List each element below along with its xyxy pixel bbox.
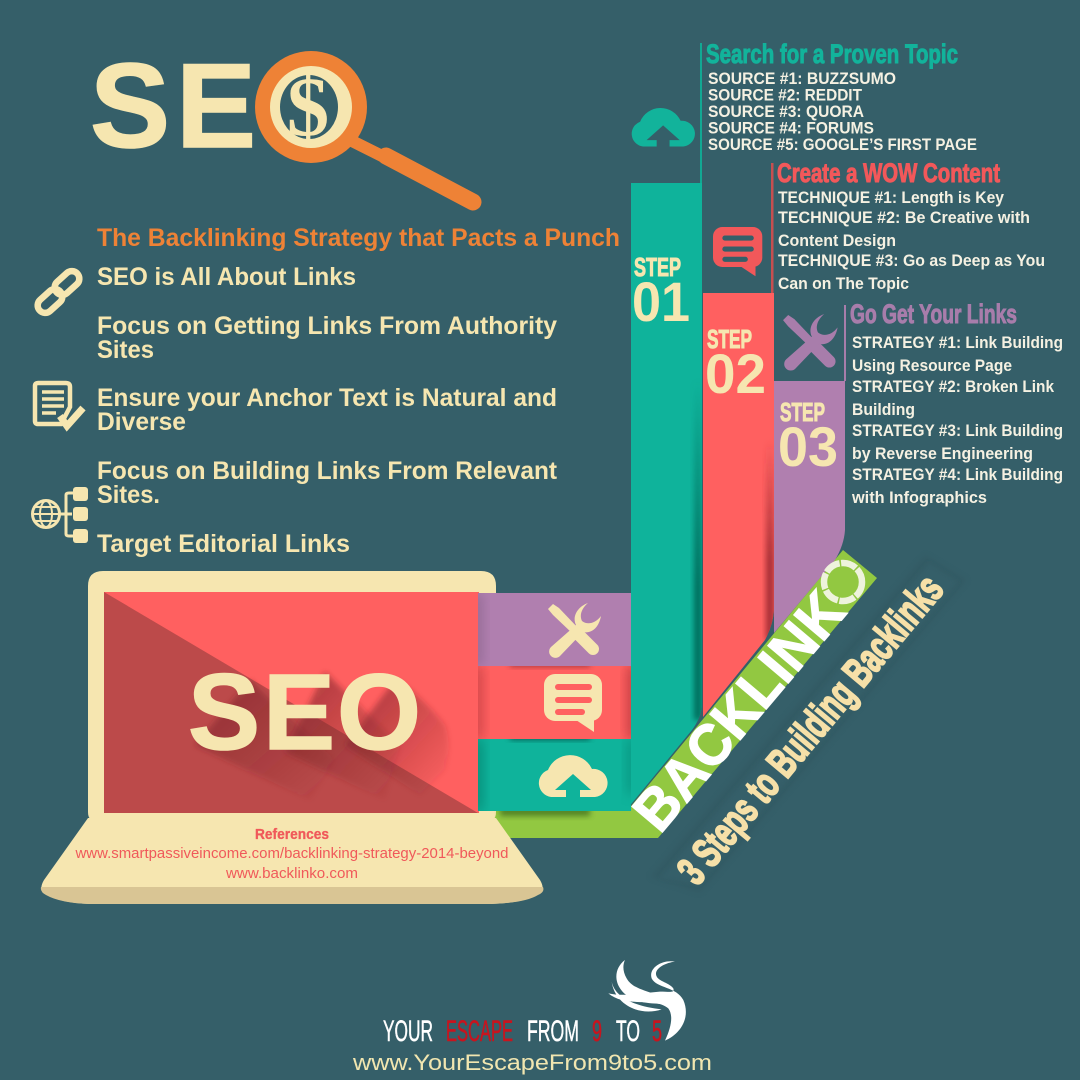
panel: step 3 column bbox=[774, 305, 846, 633]
logo wordmark: FROM bbox=[527, 1015, 579, 1048]
laptop base bbox=[41, 818, 543, 904]
step 2 techniques: TECHNIQUE #1: Length is Key bbox=[778, 188, 1004, 207]
references: www.smartpassiveincome.com/backlinking-strategy-2014-beyond bbox=[75, 845, 509, 862]
list: backlink strategy points: Target Editorial Links bbox=[97, 530, 350, 558]
list: backlink strategy points: Sites. bbox=[97, 481, 160, 509]
step 1 sources bbox=[708, 69, 977, 154]
logo: bird swoosh bbox=[608, 960, 686, 1041]
step 2 label: 02 bbox=[705, 342, 766, 405]
step 1 label: 01 bbox=[632, 270, 690, 333]
icon: tools purple bbox=[783, 314, 838, 371]
logo wordmark: YOUR bbox=[383, 1015, 433, 1048]
step 1 sources: SOURCE #3: QUORA bbox=[708, 102, 864, 121]
band: teal cloud bbox=[478, 739, 631, 811]
step 3 strategies: STRATEGY #4: Link Building bbox=[852, 465, 1063, 484]
icon: magnifying glass with dollar bbox=[255, 51, 473, 202]
logo wordmark: 9 bbox=[592, 1015, 602, 1048]
icon: magnifying glass with dollar: $ bbox=[287, 60, 329, 154]
references bbox=[75, 826, 509, 882]
SEO screen text: SEO bbox=[188, 651, 421, 772]
step 1 sources: SOURCE #4: FORUMS bbox=[708, 118, 874, 138]
banner background bbox=[660, 563, 958, 884]
list: backlink strategy points: Focus on Getting Links From Authority bbox=[97, 312, 557, 340]
icon: chat red bbox=[713, 227, 762, 276]
logo wordmark bbox=[383, 1015, 662, 1048]
step 2 techniques: TECHNIQUE #3: Go as Deep as You bbox=[778, 251, 1045, 270]
heading: strategy: The Backlinking Strategy that Pacts a Punch bbox=[97, 224, 620, 252]
panel: green backlink ribbon bbox=[490, 550, 877, 838]
step 3 strategies: STRATEGY #3: Link Building bbox=[852, 421, 1063, 440]
step 3 strategies: by Reverse Engineering bbox=[852, 444, 1033, 463]
step 2 techniques: Can on The Topic bbox=[778, 274, 909, 293]
long shadow of SEO bbox=[195, 672, 448, 800]
panel: step 2 column bbox=[703, 163, 774, 717]
icon: cloud cream bbox=[539, 755, 608, 798]
screen diagonal shade bbox=[104, 592, 478, 813]
logo wordmark: 5 bbox=[652, 1015, 662, 1048]
step 3 strategies bbox=[851, 333, 1063, 507]
step 1 sources: SOURCE #5: GOOGLE’S FIRST PAGE bbox=[708, 135, 977, 154]
icon: tools cream bbox=[548, 603, 601, 658]
laptop bbox=[41, 571, 543, 904]
website url: www.YourEscapeFrom9to5.com bbox=[352, 1050, 712, 1075]
icon: cloud teal bbox=[632, 108, 695, 147]
icon: chat cream bbox=[544, 674, 602, 732]
banner shadow bbox=[650, 555, 967, 893]
step 3 label: 03 bbox=[778, 415, 838, 478]
step 3 label: STEP bbox=[780, 397, 825, 427]
step 2 techniques bbox=[778, 188, 1045, 293]
laptop base edge bbox=[41, 887, 543, 904]
banner text: 3 Steps to Building Backlinks bbox=[668, 566, 952, 893]
step 1 heading: Search for a Proven Topic bbox=[706, 39, 958, 69]
list: backlink strategy points: Sites bbox=[97, 336, 154, 364]
icon: chain link bbox=[35, 268, 82, 316]
title: SEO with magnifying glass: SE bbox=[90, 39, 256, 173]
step 1 sources: SOURCE #2: REDDIT bbox=[708, 86, 863, 104]
panel: step 1 column bbox=[631, 43, 702, 804]
band: purple tools bbox=[472, 593, 631, 666]
step 3 strategies: STRATEGY #1: Link Building bbox=[852, 333, 1063, 352]
laptop screen bbox=[104, 592, 479, 813]
step 1 sources: SOURCE #1: BUZZSUMO bbox=[708, 69, 896, 88]
step 3 strategies: with Infographics bbox=[851, 488, 987, 507]
band: red chat bbox=[478, 666, 631, 739]
icon: globe network bbox=[32, 487, 88, 543]
icon: document with check bbox=[35, 383, 83, 426]
list: backlink strategy points: Diverse bbox=[97, 408, 186, 436]
title: SEO with magnifying glass bbox=[90, 39, 473, 202]
backlink ribbon text: BACKLINK bbox=[620, 579, 858, 843]
step 2 techniques: TECHNIQUE #2: Be Creative with bbox=[778, 208, 1030, 227]
step 1 label: STEP bbox=[634, 252, 681, 282]
logo wordmark: TO bbox=[616, 1015, 640, 1048]
step 3 strategies: STRATEGY #2: Broken Link bbox=[852, 377, 1054, 396]
step 2 heading: Create a WOW Content bbox=[777, 158, 1000, 188]
step 3 heading: Go Get Your Links bbox=[850, 299, 1017, 329]
logo wordmark: ESCAPE bbox=[446, 1015, 513, 1048]
step 2 label: STEP bbox=[707, 324, 752, 354]
list: backlink strategy points: Focus on Building Links From Relevant bbox=[97, 457, 558, 485]
list: backlink strategy points bbox=[97, 263, 558, 558]
step 3 strategies: Building bbox=[852, 400, 915, 419]
step 3 strategies: Using Resource Page bbox=[852, 356, 1012, 375]
shadow: below teal band on green ribbon bbox=[500, 807, 590, 816]
step 2 techniques: Content Design bbox=[778, 231, 896, 250]
references: www.backlinko.com bbox=[225, 865, 358, 882]
references: References bbox=[255, 826, 329, 843]
laptop lid bbox=[88, 571, 496, 822]
icon: ring O bbox=[824, 563, 862, 601]
list: backlink strategy points: SEO is All About Links bbox=[97, 263, 356, 291]
list: backlink strategy points: Ensure your Anchor Text is Natural and bbox=[97, 384, 557, 412]
